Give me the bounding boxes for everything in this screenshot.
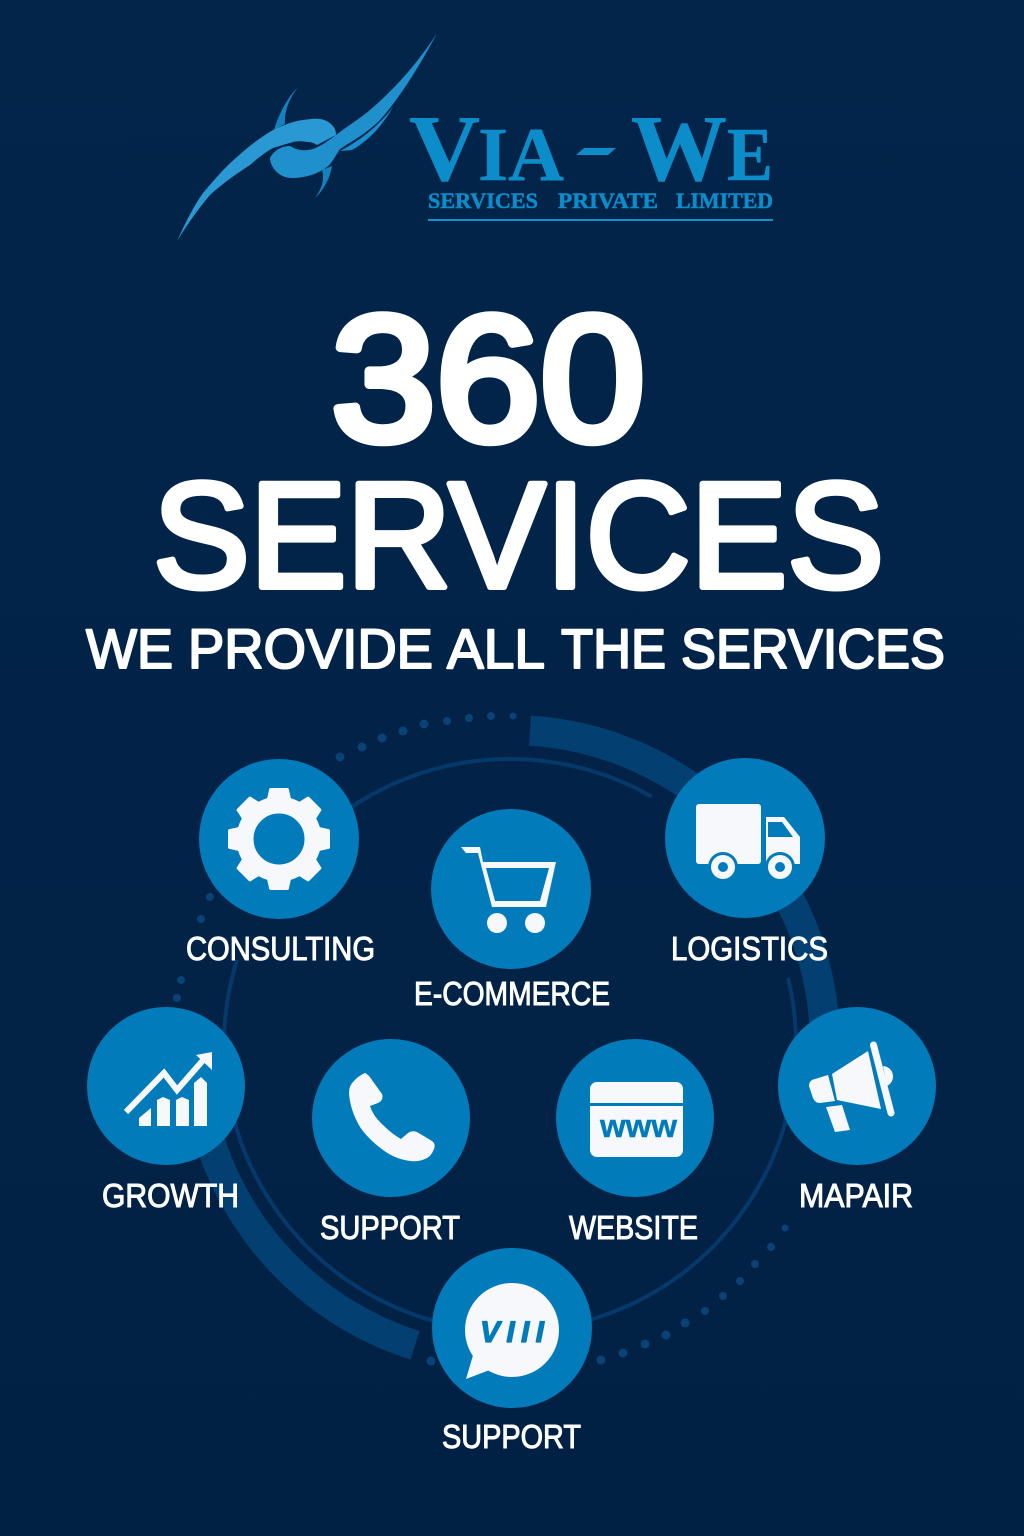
ring: background arcs and dots [173,712,825,1366]
tagline: services private limited: LIMITED [676,188,773,213]
service: e-commerce [414,809,610,1012]
icon: speech bubble: VIII [480,1316,545,1349]
label: GROWTH [102,1177,239,1214]
wordmark: VIA - WE: IA [478,113,564,197]
subtitle: SERVICES [681,617,945,680]
subtitle: PROVIDE [188,617,433,680]
wordmark: VIA - WE: V [409,97,480,201]
icon: shopping cart [461,847,556,933]
icon: browser window: www [599,1108,677,1144]
subtitle: ALL [447,617,545,680]
wordmark: VIA - WE: E [727,113,773,197]
wordmark: VIA - WE [409,97,773,201]
subtitle: WE [86,617,173,680]
subtitle: THE [561,617,666,680]
icon: delivery truck [696,804,800,882]
icon: browser window [590,1082,683,1157]
tagline: services private limited: SERVICES [428,188,538,213]
title: 360 services: 360 [331,279,645,478]
tagline: services private limited [428,188,773,221]
label: SUPPORT [442,1418,581,1455]
service: phone support [312,1039,470,1246]
icon: growth chart [126,1052,212,1126]
service: chat support [432,1248,592,1455]
label: WEBSITE [569,1209,698,1246]
logo mark: swoosh knot [177,33,437,241]
icon: megaphone [809,1045,893,1132]
subtitle [86,617,945,680]
service: marketing [778,1007,936,1214]
title: 360 services [153,279,884,619]
logo: Via-We Services Private Limited [177,33,773,241]
label: CONSULTING [186,930,375,967]
label: LOGISTICS [671,930,828,967]
service: growth [87,1007,245,1214]
wordmark: VIA - WE: W [631,97,727,201]
service: website [556,1039,714,1246]
service: logistics [665,758,828,967]
label: E-COMMERCE [414,975,610,1012]
label: SUPPORT [320,1209,460,1246]
tagline: services private limited: PRIVATE [558,188,658,213]
icon: speech bubble [465,1283,559,1379]
title: 360 services: SERVICES [153,451,884,619]
label: MAPAIR [799,1177,913,1214]
service: consulting [186,759,375,967]
icon: gear [228,788,330,890]
icon: telephone [349,1073,435,1161]
